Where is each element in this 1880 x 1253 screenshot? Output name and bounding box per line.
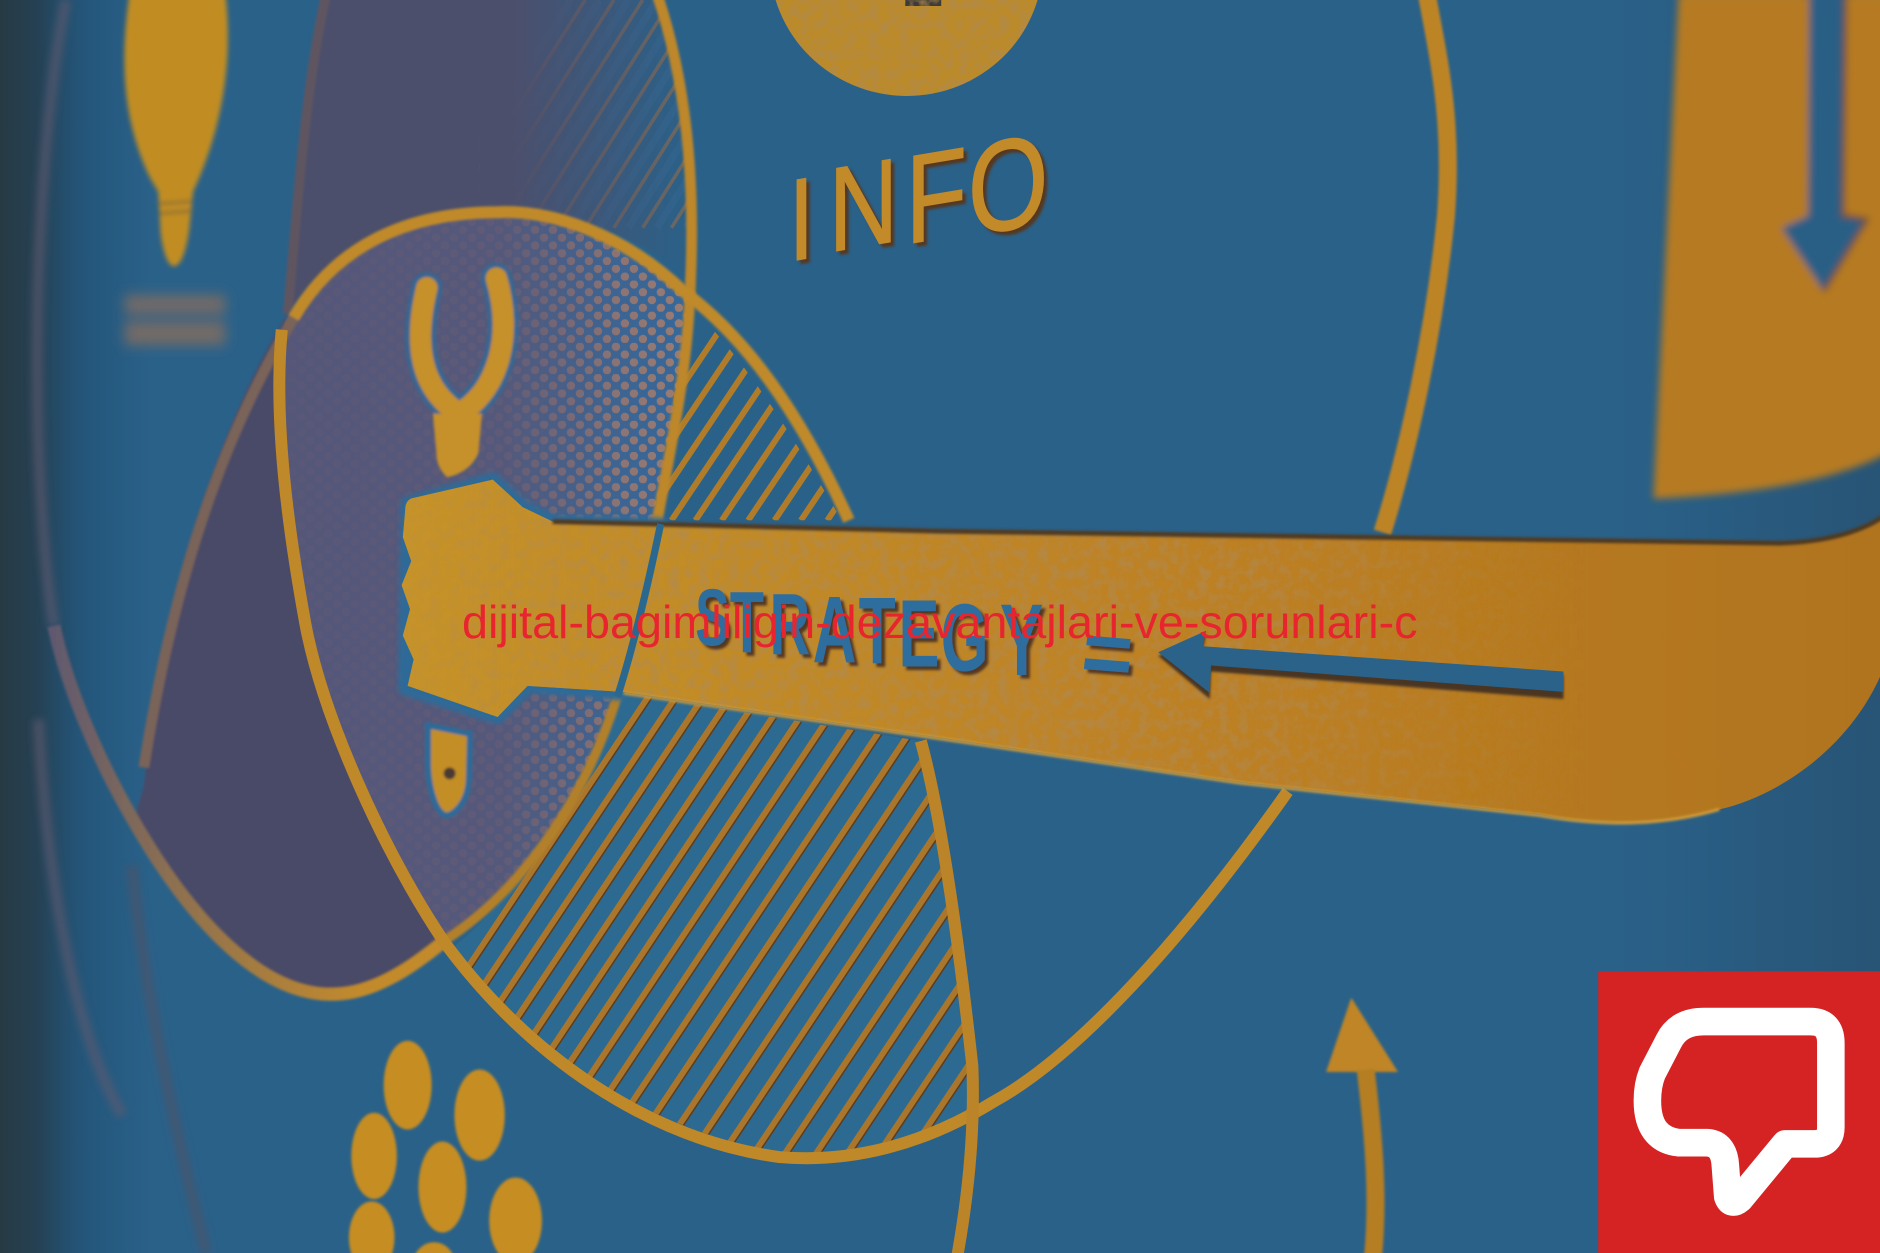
panel: orange arm band with fist (402, 480, 1880, 823)
icon: handle end below fist (428, 725, 470, 815)
hatch: large striped lower lens (455, 696, 967, 1152)
blue halo around fist (405, 480, 662, 717)
arc: top venn circle outline (144, 212, 849, 767)
heading: INFO: O (968, 105, 1048, 264)
text: STRATEGY on band: T (859, 577, 896, 683)
text: STRATEGY on band: T (730, 572, 764, 671)
icon: equals sign (1084, 635, 1131, 673)
arc: vertical lower right circle outline (921, 741, 973, 1253)
panel: top-right orange block with down arrow (1653, 0, 1880, 499)
far-left muted arcs (37, 0, 206, 1253)
icon: white thumbs-down bubble (1647, 1022, 1831, 1202)
heading: INFO: F (905, 121, 967, 272)
text: STRATEGY on band: R (770, 575, 810, 674)
label: blurred bulb caption (125, 295, 225, 345)
hatch: upper muted diagonal lines (480, 0, 688, 248)
watermark text: dijital-bagimliligin-dezavantajlari-ve-sorunlari-c (462, 596, 1418, 648)
icon: fork on top of fist (420, 278, 503, 477)
heading: INFO (788, 105, 1048, 294)
logo: red corner square with thumbs-down speech bubble (1598, 971, 1880, 1253)
arc: left venn circle outline (54, 0, 692, 994)
line: venn arc crossing the band (617, 524, 661, 697)
icon: top yellow circle (756, 0, 1056, 109)
heading: INFO: N (829, 133, 898, 279)
text: STRATEGY on band (695, 572, 1043, 698)
hatch: small striped wedge (666, 332, 837, 520)
text: STRATEGY on band: Y (1000, 585, 1043, 698)
text: STRATEGY on band: A (813, 576, 856, 682)
icon: light bulb (124, 0, 228, 266)
panel: dark purple left lens (134, 314, 444, 994)
text: STRATEGY on band: E (899, 581, 940, 688)
text: STRATEGY on band: G (941, 585, 989, 692)
icon: up arrow (1326, 998, 1398, 1253)
text: STRATEGY on band: S (695, 574, 730, 663)
heading: INFO: I (788, 153, 814, 287)
panel: purple upper venn region (288, 0, 516, 314)
icon: dot cluster (349, 1041, 542, 1253)
arrow: blue left arrow on band (1158, 631, 1563, 699)
overlay: purple fade over the upper hatch (480, 0, 650, 248)
panel: dotted central lens (283, 212, 686, 941)
arc: large right venn circle outline (279, 0, 1448, 1158)
